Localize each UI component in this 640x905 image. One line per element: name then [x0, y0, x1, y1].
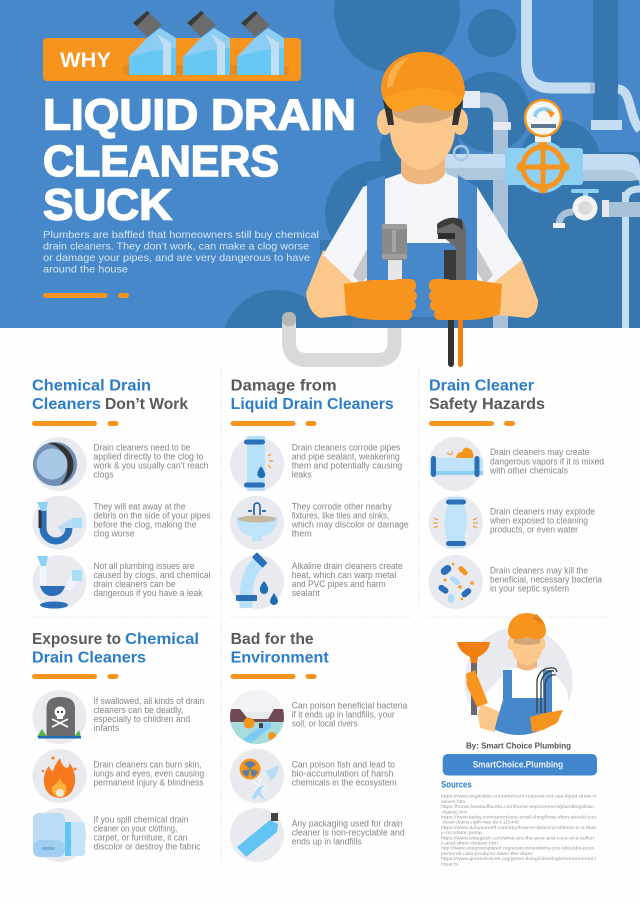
pipe held by plumber — [282, 260, 394, 360]
text: dangerous if you have a leak — [94, 588, 203, 598]
icon: pipe with vapors — [429, 437, 483, 491]
icon: radiation and fish bones — [230, 749, 284, 803]
sources list: http://www.onegreenplanet.org/environment/why-you-shouldnt-pour- — [441, 846, 596, 851]
text: them and potentially causing — [292, 461, 402, 471]
accent bar — [32, 421, 118, 426]
text: clogs — [94, 470, 114, 480]
sources list: c-acid-drain-cleaner.htm — [441, 840, 498, 846]
text: if it ends up in landfills, your — [292, 710, 395, 720]
text — [490, 565, 602, 594]
text: Drain cleaners corrode pipes — [292, 442, 401, 452]
heading: Safety Hazards — [429, 396, 545, 413]
heading: Environment — [231, 649, 329, 666]
accent bar — [429, 421, 515, 426]
text: which may discolor or damage — [291, 520, 409, 530]
text: when exposed to cleaning — [489, 515, 588, 525]
heading: Don’t Work — [105, 396, 188, 413]
text: bio-accumulation of harsh — [292, 768, 393, 778]
text: caused by clogs, and chemical — [94, 570, 210, 580]
text: Alkaline drain cleaners create — [292, 561, 403, 571]
heading: Damage from — [231, 378, 337, 394]
icon: leaking p-trap — [32, 555, 86, 609]
heading: Exposure to — [32, 631, 121, 648]
text — [94, 502, 211, 539]
accent bar — [230, 674, 316, 679]
sources list: y-circulator-pump — [441, 830, 483, 835]
text: Any packaging used for drain — [292, 819, 403, 829]
text — [291, 502, 409, 539]
panel: damage from liquid drain cleaners — [230, 378, 409, 609]
text — [489, 506, 595, 534]
title — [43, 90, 356, 230]
text: debris on the side of your pipes — [94, 511, 211, 521]
text: fixtures, like tiles and sinks, — [292, 511, 389, 521]
text: drain cleaners can be — [94, 579, 176, 589]
text: especially to children and — [94, 714, 190, 724]
text: Drain cleaners may kill the — [490, 565, 588, 575]
accent bar — [230, 421, 316, 426]
text: cleaner on your clothing, — [94, 823, 177, 833]
heading: Chemical Drain — [32, 378, 151, 394]
dotted dividers — [32, 368, 608, 865]
icon: drain strainer — [32, 437, 86, 491]
accent bar — [32, 674, 118, 679]
wrench — [437, 218, 466, 367]
intro paragraph: around the house — [43, 264, 128, 276]
text: cleaners can be deadly, — [94, 705, 183, 715]
badge: why — [43, 11, 301, 81]
text: clog worse — [94, 529, 134, 539]
title: SUCK — [43, 180, 172, 230]
author credit: By: Smart Choice Plumbing — [466, 741, 571, 751]
icon: corroded pipe — [230, 436, 284, 491]
background pipes — [438, 0, 640, 328]
icon: water meter valve — [505, 100, 583, 194]
text — [292, 701, 407, 729]
text: soil, or local rivers — [292, 719, 358, 729]
text: Drain cleaners may explode — [490, 506, 595, 516]
text: permanent injury & blindness — [94, 778, 204, 788]
text: Can poison beneficial bacteria — [292, 701, 407, 711]
heading — [32, 378, 188, 413]
sources list: https://www.angieslist.com/articles/4-reasons-not-use-liquid-drain-cl — [441, 794, 596, 799]
text: beneficial, necessary bacteria — [490, 574, 602, 584]
text: infants — [94, 723, 120, 733]
text: cleaner is non-recyclable and — [292, 828, 405, 838]
label: why: WHY — [60, 49, 111, 72]
intro paragraph: or damage your pipes, and are very dangerous to have — [43, 252, 310, 264]
text: carpet, or furniture, it can — [94, 832, 188, 842]
website button: SmartChoice.Plumbing — [473, 760, 563, 770]
text: Drain cleaners need to be — [94, 442, 190, 452]
heading: Bad for the — [231, 631, 314, 648]
text: products, or even water — [490, 524, 578, 534]
text: dangerous vapors if it is mixed — [490, 456, 604, 466]
sources list: -cleaner2.htm — [441, 809, 467, 814]
text — [292, 759, 397, 787]
sources list: personal-care-products-down-the-drain/ — [441, 851, 534, 856]
text: in your septic system — [490, 584, 569, 594]
panel: author and sources — [441, 613, 597, 866]
heading: Cleaners — [32, 396, 101, 413]
overalls — [367, 175, 477, 328]
heading: Drain Cleaners — [32, 649, 146, 666]
sources list: https://www.doityourself.com/stry/how-to-detect-problems-in-a-fault — [441, 825, 597, 830]
plumber with plunger illustration — [457, 613, 572, 740]
intro paragraph: Plumbers are baffled that homeowners still buy chemical — [43, 229, 319, 241]
intro paragraph — [43, 229, 319, 276]
accent bar — [43, 293, 129, 298]
icon: polluted river landscape — [230, 690, 284, 744]
intro paragraph: drain cleaners. They don’t work, can make a clog worse — [43, 240, 309, 252]
text: and PVC pipes and harm — [292, 579, 386, 589]
icon: bulging pipe — [429, 496, 483, 550]
icon: flame — [32, 749, 86, 803]
icon: p-trap with debris — [32, 496, 86, 550]
text: Drain cleaners may create — [490, 447, 590, 457]
text: before the clog, making the — [94, 520, 196, 530]
icon: sink — [230, 496, 284, 550]
text: chemicals in the ecosystem — [292, 777, 397, 787]
heading: Drain Cleaner — [429, 378, 534, 394]
pipe coupling — [382, 224, 407, 282]
text — [292, 819, 405, 847]
title: LIQUID DRAIN — [43, 90, 356, 140]
header banner — [0, 0, 640, 328]
panel: exposure to chemical drain cleaners — [32, 631, 204, 862]
panel: bad for the environment — [230, 631, 407, 862]
icon: bacteria — [429, 555, 483, 609]
text: Can poison fish and lead to — [292, 759, 395, 769]
text: applied directly to the clog to — [94, 452, 204, 462]
sources list: https://www.wisegeek.com/what-are-the-pros-and-cons-of-a-sulfuri — [441, 835, 594, 840]
text — [292, 442, 402, 480]
text — [94, 561, 210, 598]
text — [94, 696, 204, 733]
website button — [443, 754, 597, 776]
sources list: -clean-drains-right-way-do-t-115446 — [441, 820, 520, 825]
text: They will eat away at the — [94, 502, 186, 512]
heading — [429, 378, 545, 413]
text: If swallowed, all kinds of drain — [94, 696, 204, 706]
sources heading: Sources — [441, 779, 472, 789]
text — [292, 561, 403, 598]
heading — [231, 378, 394, 413]
sources list: https://home.howstuffworks.com/home-improvement/plumbing/drain — [441, 804, 595, 809]
panel: chemical drain cleaners don't work — [32, 378, 211, 609]
icon: tombstone with skull — [32, 690, 86, 744]
text — [489, 447, 604, 475]
sources list: https://www.today.com/series/one-small-thing/how-often-should-you — [441, 814, 597, 820]
text: ends up in landfills — [292, 837, 362, 847]
text — [93, 442, 208, 480]
text: leaks — [292, 470, 312, 480]
cap — [381, 52, 465, 112]
icon: three drain cleaner bottles — [129, 11, 284, 75]
heading — [231, 631, 329, 666]
text: Not all plumbing issues are — [94, 561, 194, 571]
sources list: mpacts — [441, 861, 459, 866]
sources list: https://www.greenchoices.org/green-living/cleaning/environmental-i — [441, 856, 596, 861]
heading — [32, 631, 199, 666]
text: heat, which can warp metal — [292, 570, 396, 580]
sources list: eaners.htm — [441, 799, 465, 804]
icon: discarded bottle — [230, 808, 284, 862]
text — [94, 760, 204, 788]
text: discolor or destroy the fabric — [94, 841, 201, 851]
text: with other chemicals — [489, 465, 568, 475]
plumber illustration — [282, 52, 538, 367]
text — [94, 814, 201, 851]
title: CLEANERS — [43, 137, 279, 186]
text: Drain cleaners can burn skin, — [94, 760, 202, 770]
gloves — [344, 279, 502, 320]
text: lungs and eyes, even causing — [94, 769, 204, 779]
panel: drain cleaner safety hazards — [429, 378, 604, 609]
text: If you spill chemical drain — [94, 814, 188, 824]
heading: Liquid Drain Cleaners — [231, 396, 394, 413]
icon: stained fabric — [32, 808, 86, 862]
heading: Chemical — [125, 631, 199, 648]
icon: faucet — [553, 189, 640, 228]
text: and pipe sealant, weakening — [292, 452, 400, 462]
text: them — [292, 529, 312, 539]
sources list — [441, 794, 597, 866]
text: work & you usually can’t reach — [93, 461, 208, 471]
text: They corrode other nearby — [292, 502, 392, 512]
icon: warped pipe with drops — [230, 552, 284, 609]
text: sealant — [292, 588, 320, 598]
